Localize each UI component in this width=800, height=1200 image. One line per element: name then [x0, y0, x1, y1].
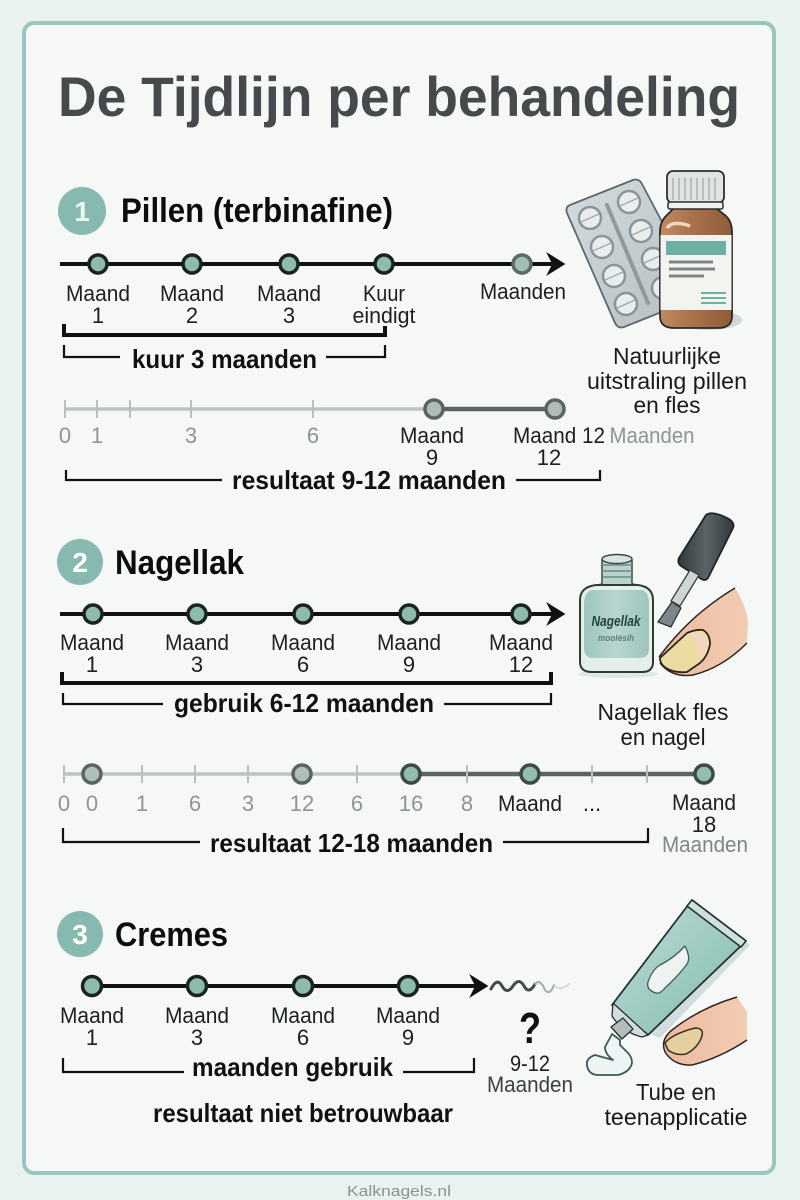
timeline: gebruik: 1	[86, 652, 98, 677]
icon: nail polish and finger	[578, 513, 748, 678]
heading: pillen: Pillen (terbinafine)	[121, 192, 393, 230]
icon: blister pack and bottle	[566, 171, 742, 330]
bracket: gebruik thick	[62, 672, 551, 683]
panel: section 1 pillen	[58, 171, 747, 495]
timeline: resultaat	[58, 765, 748, 857]
timeline: gebruik: 3	[191, 652, 203, 677]
caption: cremes: Tube en	[636, 1079, 716, 1105]
bracket: kuur thick	[64, 324, 385, 335]
bracket label: kuur 3 maanden: kuur 3 maanden	[132, 344, 317, 374]
caption: pillen: Natuurlijke	[613, 343, 721, 369]
icon: nail polish and finger: Nagellak	[592, 613, 641, 630]
number badge 2	[57, 539, 103, 585]
timeline: resultaat: 0	[59, 423, 71, 448]
timeline: resultaat: 3	[185, 423, 197, 448]
bracket label: resultaat 12-18 maanden: resultaat 12-18 maanden	[210, 828, 493, 858]
timeline: kuur: eindigt	[352, 303, 416, 328]
timeline: resultaat: 6	[189, 791, 201, 816]
timeline: kuur: Kuur	[363, 281, 405, 306]
timeline: gebruik: Maand	[165, 630, 229, 655]
timeline: kuur: 2	[186, 303, 198, 328]
bracket label: gebruik 6-12 maanden: gebruik 6-12 maanden	[174, 688, 434, 718]
heading: nagellak: Nagellak	[115, 544, 244, 582]
timeline: gebruik: Maand	[489, 630, 553, 655]
timeline: cremes: Maand	[376, 1003, 440, 1028]
caption: cremes	[604, 1079, 748, 1130]
bracket label: resultaat 9-12 maanden: resultaat 9-12 maanden	[232, 465, 506, 495]
timeline: cremes: 3	[191, 1025, 203, 1050]
caption: pillen	[587, 343, 747, 418]
caption: nagellak: en nagel	[620, 724, 706, 750]
icon: cream tube and toe	[587, 900, 750, 1075]
timeline: resultaat: 1	[91, 423, 103, 448]
number badge 1	[58, 187, 106, 235]
heading: cremes: Cremes	[115, 916, 228, 954]
footer: source: Kalknagels.nl	[347, 1183, 451, 1200]
timeline: resultaat: 0	[58, 791, 70, 816]
timeline: resultaat: Maanden	[662, 832, 748, 857]
timeline: resultaat: 0	[86, 791, 98, 816]
timeline: resultaat: 6	[307, 423, 319, 448]
timeline: kuur	[60, 254, 566, 328]
timeline: resultaat: Maand 12	[513, 423, 605, 448]
caption: cremes: teenapplicatie	[604, 1104, 748, 1130]
timeline: cremes: Maand	[60, 1003, 124, 1028]
bracket label: maanden gebruik	[63, 1052, 474, 1082]
timeline: resultaat: 8	[461, 791, 473, 816]
note: resultaat niet betrouwbaar: resultaat niet betrouwbaar	[153, 1098, 453, 1128]
timeline: resultaat: Maand	[672, 790, 736, 815]
title: De Tijdlijn per behandeling	[58, 65, 740, 128]
timeline: resultaat: ...	[583, 791, 601, 816]
bracket label: resultaat 9-12 maanden	[66, 465, 600, 495]
timeline: gebruik: Maand	[377, 630, 441, 655]
unknown outcome marker: ?	[519, 1004, 541, 1053]
timeline: resultaat: 1	[136, 791, 148, 816]
timeline: resultaat: 12	[537, 445, 561, 470]
timeline: resultaat: Maand	[498, 791, 562, 816]
timeline: gebruik: Maand	[60, 630, 124, 655]
caption: nagellak	[598, 699, 728, 750]
timeline: gebruik: Maand	[271, 630, 335, 655]
timeline: cremes: Maand	[271, 1003, 335, 1028]
unknown outcome marker	[487, 1004, 573, 1097]
timeline: kuur: Maand	[257, 281, 321, 306]
timeline: cremes: Maand	[165, 1003, 229, 1028]
bracket label: kuur 3 maanden	[64, 344, 385, 374]
icon: nail polish and finger: moolésih	[598, 633, 634, 643]
timeline: resultaat	[59, 400, 694, 470]
timeline: gebruik: 9	[403, 652, 415, 677]
timeline: kuur: Maanden	[480, 279, 566, 304]
timeline: resultaat: Maand	[400, 423, 464, 448]
timeline: kuur: Maand	[160, 281, 224, 306]
timeline: resultaat: Maanden	[610, 423, 694, 448]
caption: pillen: uitstraling pillen	[587, 368, 747, 394]
unknown outcome marker: 9-12	[510, 1051, 550, 1076]
bracket label: gebruik 6-12 maanden	[63, 688, 551, 718]
timeline: resultaat: 16	[399, 791, 423, 816]
timeline: kuur: 1	[92, 303, 104, 328]
number badge 3	[57, 911, 103, 957]
timeline: resultaat: 12	[290, 791, 314, 816]
caption: pillen: en fles	[634, 392, 700, 418]
timeline: resultaat: 18	[692, 812, 716, 837]
timeline: cremes: 9	[402, 1025, 414, 1050]
icon: fading squiggle	[491, 982, 569, 992]
timeline: resultaat: 3	[242, 791, 254, 816]
panel: section 3 cremes	[57, 900, 750, 1130]
bracket label: maanden gebruik: maanden gebruik	[192, 1052, 393, 1082]
timeline: gebruik: 12	[509, 652, 533, 677]
unknown outcome marker: Maanden	[487, 1072, 573, 1097]
timeline: kuur: Maand	[66, 281, 130, 306]
timeline: resultaat: 6	[351, 791, 363, 816]
number badge 3: 3	[72, 919, 88, 950]
bracket label: resultaat 12-18 maanden	[63, 828, 648, 858]
timeline: kuur: 3	[283, 303, 295, 328]
timeline: cremes: 6	[297, 1025, 309, 1050]
number badge 2: 2	[72, 547, 88, 578]
timeline: cremes	[60, 976, 487, 1050]
timeline: cremes: 1	[86, 1025, 98, 1050]
timeline: gebruik	[60, 604, 564, 677]
panel: section 2 nagellak	[57, 513, 748, 858]
caption: nagellak: Nagellak fles	[598, 699, 728, 725]
number badge 1: 1	[74, 196, 90, 227]
timeline: gebruik: 6	[297, 652, 309, 677]
timeline: resultaat: 9	[426, 445, 438, 470]
